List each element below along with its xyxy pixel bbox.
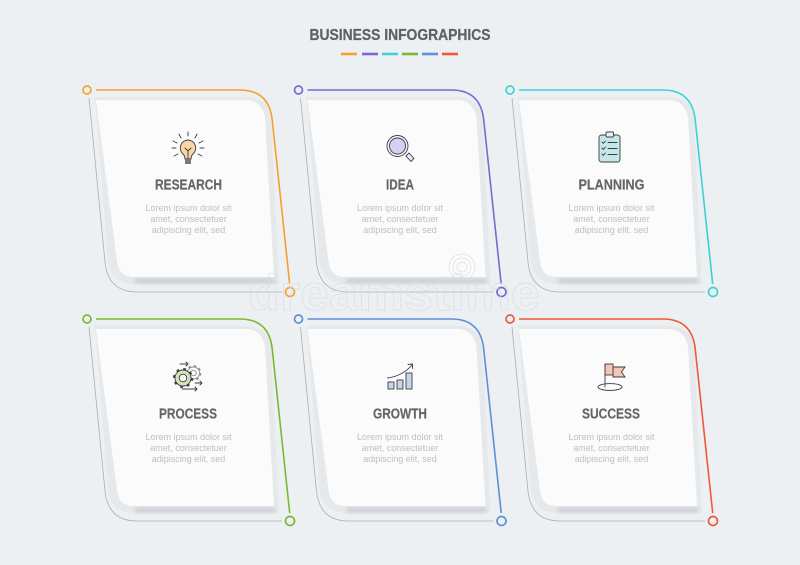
text: success xyxy=(568,432,655,464)
panel: success xyxy=(506,315,718,526)
heading: growth: GROWTH xyxy=(373,406,427,422)
heading: research: RESEARCH xyxy=(155,178,222,194)
heading: planning: PLANNING xyxy=(578,178,644,194)
text: process: Lorem ipsum dolor sit xyxy=(145,432,232,442)
heading: success: SUCCESS xyxy=(582,406,640,422)
text: process: adipiscing elit, sed xyxy=(152,454,225,464)
icon: magnifier xyxy=(387,136,414,162)
text: planning: amet, consectetuer xyxy=(573,214,650,224)
text: success: Lorem ipsum dolor sit xyxy=(568,432,655,442)
text: planning: adipiscing elit, sed xyxy=(575,225,648,235)
text: success: adipiscing elit, sed xyxy=(575,454,648,464)
text: process: amet, consectetuer xyxy=(150,443,227,453)
text: success: amet, consectetuer xyxy=(573,443,650,453)
icon: flag xyxy=(598,364,625,390)
text: growth: adipiscing elit, sed xyxy=(363,454,437,464)
watermark: dreamstime xyxy=(248,265,540,321)
panel: planning xyxy=(506,86,718,296)
panel: growth xyxy=(294,315,506,526)
icon: growth chart xyxy=(388,364,412,389)
text: process xyxy=(145,432,232,464)
text: idea: adipiscing elit, sed xyxy=(363,225,437,235)
text: growth xyxy=(357,432,444,464)
panel: idea xyxy=(294,86,506,296)
panel: research xyxy=(83,86,294,296)
text: idea: Lorem ipsum dolor sit xyxy=(357,203,444,213)
title: BUSINESS INFOGRAPHICS xyxy=(310,27,490,44)
colour key dashes xyxy=(341,53,458,55)
text: growth: Lorem ipsum dolor sit xyxy=(357,432,444,442)
text: idea xyxy=(357,203,444,235)
heading: process: PROCESS xyxy=(159,406,217,422)
text: idea: amet, consectetuer xyxy=(362,214,438,224)
text: growth: amet, consectetuer xyxy=(362,443,438,453)
text: research: Lorem ipsum dolor sit xyxy=(145,203,232,213)
panel: process xyxy=(83,315,294,526)
text: research: adipiscing elit, sed xyxy=(152,225,225,235)
heading: idea: IDEA xyxy=(386,178,414,194)
icon: clipboard xyxy=(599,132,620,162)
text: research: amet, consectetuer xyxy=(150,214,227,224)
text: planning: Lorem ipsum dolor sit xyxy=(568,203,655,213)
text: research xyxy=(145,203,232,235)
icon: light bulb xyxy=(172,132,204,164)
text: planning xyxy=(568,203,655,235)
icon: gears and arrows xyxy=(174,362,202,391)
